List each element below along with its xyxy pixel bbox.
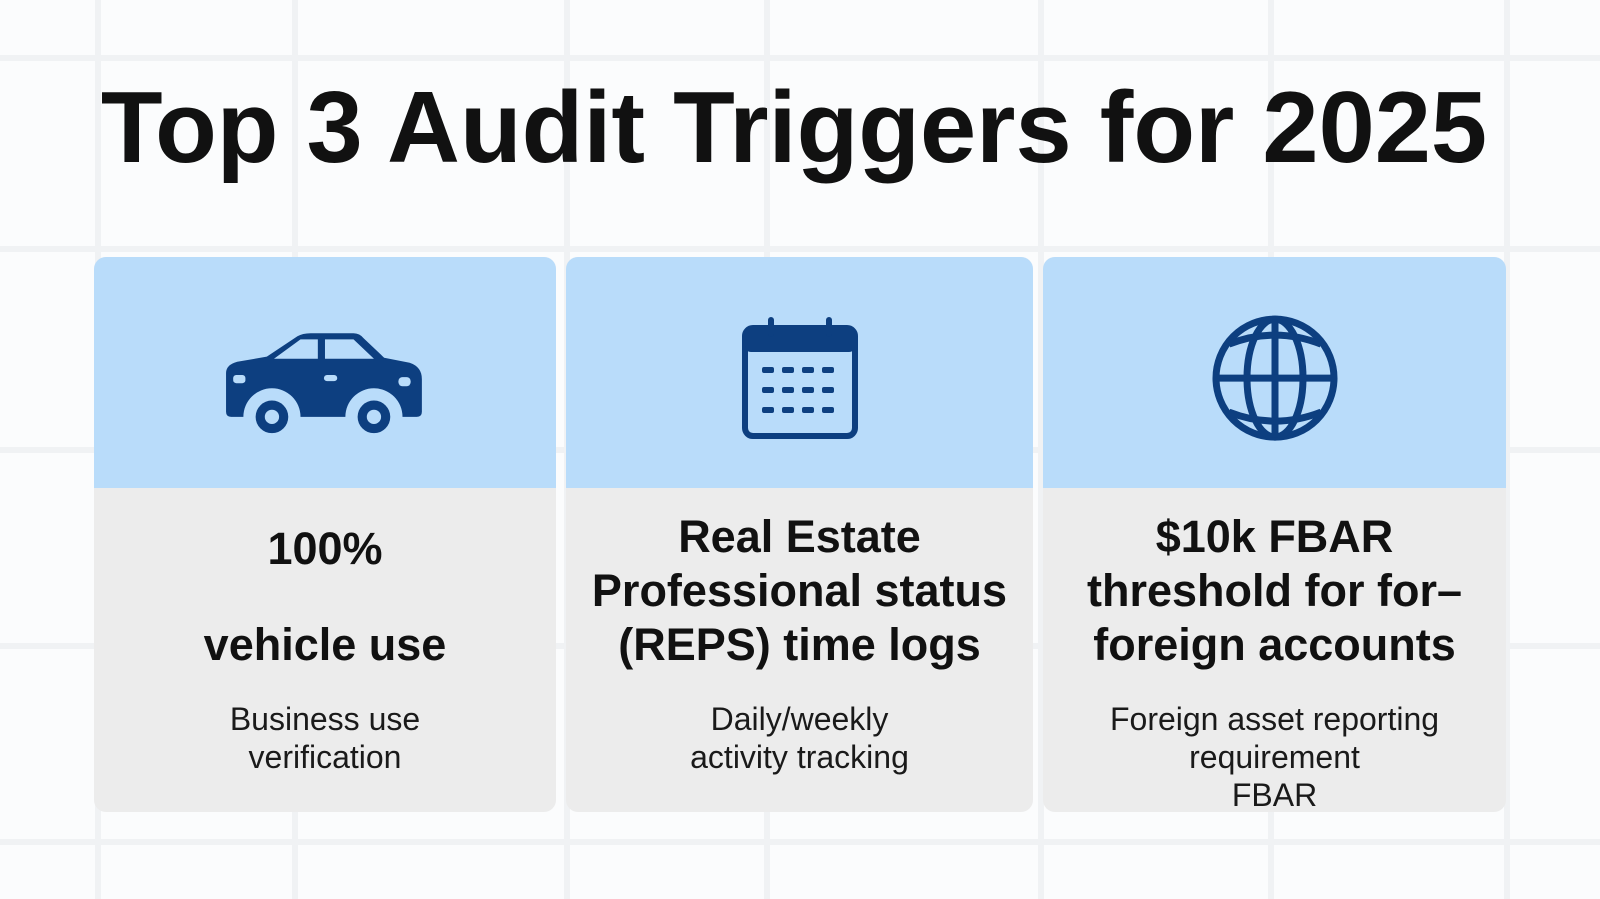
- subtext: Business use: [230, 701, 420, 737]
- subtext: [1110, 701, 1439, 812]
- subtext: FBAR: [1232, 777, 1317, 812]
- subtext: requirement: [1189, 739, 1360, 775]
- heading: [592, 511, 1007, 670]
- panel: vehicle: [94, 257, 556, 812]
- heading: threshold for for–: [1087, 565, 1462, 616]
- heading: (REPS) time logs: [618, 619, 981, 670]
- panel: REPS: [566, 257, 1033, 812]
- heading: 100%: [267, 523, 383, 574]
- icon: calendar: [566, 257, 1033, 488]
- subtext: [690, 701, 909, 775]
- heading: Real Estate: [678, 511, 921, 562]
- heading: $10k FBAR: [1156, 511, 1393, 562]
- heading: Professional status: [592, 565, 1007, 616]
- icon: globe: [1043, 257, 1506, 488]
- subtext: verification: [249, 739, 401, 775]
- panel: FBAR: [1043, 257, 1506, 812]
- subtext: Daily/weekly: [711, 701, 888, 737]
- subtext: activity tracking: [690, 739, 909, 775]
- heading: foreign accounts: [1093, 619, 1456, 670]
- subtext: [230, 701, 420, 775]
- heading: [1087, 511, 1462, 670]
- subtext: Foreign asset reporting: [1110, 701, 1439, 737]
- panel: vehicle: vehicle use: [204, 619, 446, 670]
- icon: car: [94, 257, 556, 488]
- title: Top 3 Audit Triggers for 2025: [101, 72, 1487, 184]
